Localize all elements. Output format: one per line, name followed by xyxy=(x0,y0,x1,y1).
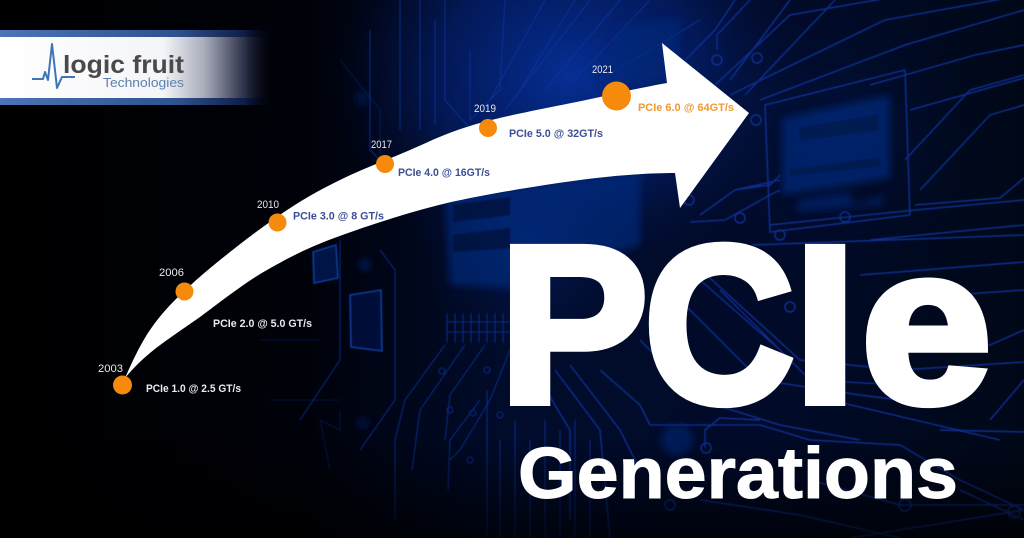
title: PCIe: P xyxy=(499,200,648,450)
subtitle: Generations: Generations xyxy=(518,434,958,514)
title: PCIe: I xyxy=(794,200,856,450)
milestone 2006 xyxy=(159,267,312,330)
title: PCIe xyxy=(499,199,992,450)
chip blocks xyxy=(313,245,382,351)
milestone 2021: PCIe 6.0 @ 64GT/s xyxy=(638,102,734,114)
logo wordmark: logic fruit xyxy=(63,51,185,79)
milestone 2003 xyxy=(98,363,241,395)
milestone 2019 xyxy=(474,103,603,140)
growth arrow xyxy=(125,43,749,378)
logo subtitle: Technologies xyxy=(103,75,185,90)
blurred monitor shapes xyxy=(355,18,890,456)
milestone 2003: 2003 xyxy=(98,363,123,375)
logo band xyxy=(0,30,272,105)
milestone 2017 xyxy=(371,139,490,179)
milestone 2006: PCIe 2.0 @ 5.0 GT/s xyxy=(213,318,312,330)
milestone 2010 xyxy=(257,199,384,232)
milestone 2019: 2019 xyxy=(474,103,496,115)
milestone 2017: 2017 xyxy=(371,139,392,151)
diagonal traces behind the title xyxy=(540,280,1000,538)
milestone 2021 xyxy=(592,64,734,114)
lower middle traces xyxy=(260,240,590,538)
milestone 2010: 2010 xyxy=(257,199,279,211)
milestone 2017: PCIe 4.0 @ 16GT/s xyxy=(398,167,490,179)
milestone 2019: PCIe 5.0 @ 32GT/s xyxy=(509,128,603,140)
upper middle traces xyxy=(340,0,700,170)
title: PCIe: C xyxy=(644,199,794,450)
milestone 2021: 2021 xyxy=(592,64,613,76)
milestone 2006: 2006 xyxy=(159,267,184,279)
milestone 2003: PCIe 1.0 @ 2.5 GT/s xyxy=(146,383,241,395)
icon: heartbeat pulse xyxy=(32,44,75,88)
milestone 2010: PCIe 3.0 @ 8 GT/s xyxy=(293,210,384,222)
title: PCIe: e xyxy=(861,199,992,450)
